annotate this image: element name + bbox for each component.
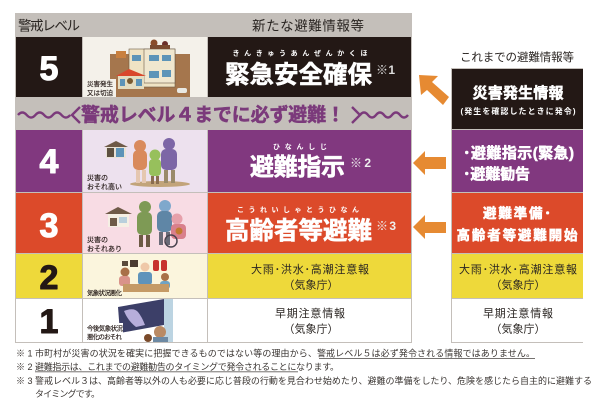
previous: early warning information bbox=[452, 299, 583, 342]
icon: family checking hazard map: 気象状況悪化 bbox=[87, 288, 122, 297]
previous: disaster occurrence information: (発生を確認したときに発令) bbox=[460, 106, 576, 116]
row: level 3: 3 bbox=[40, 207, 58, 245]
action label: heavy rain advisories: （気象庁） bbox=[284, 278, 338, 292]
previous: preparation and elderly evacuation: 高齢者等避難開始 bbox=[456, 227, 578, 243]
icon: elderly evacuating with wheelchair bbox=[83, 193, 207, 253]
action label: early warning information bbox=[208, 299, 411, 342]
heading: new evacuation information: 新たな避難情報等 bbox=[252, 18, 364, 34]
heading: warning level bbox=[16, 14, 81, 37]
icon: elderly evacuating with wheelchair: おそれあり bbox=[87, 245, 122, 253]
action label: evacuation of elderly: 高齢者等避難 bbox=[225, 217, 372, 245]
previous: disaster occurrence information bbox=[452, 69, 583, 129]
action label: early warning information: 早期注意情報 bbox=[275, 307, 345, 320]
previous: heavy rain advisories bbox=[452, 254, 583, 298]
row: level 4: 4 bbox=[40, 143, 59, 181]
row: level 1 bbox=[16, 299, 411, 342]
action label: heavy rain advisories bbox=[208, 254, 411, 298]
previous: heavy rain advisories: （気象庁） bbox=[490, 278, 546, 292]
previous: evacuation order and advisory bbox=[452, 130, 583, 192]
footnote 3: タイミングです。 bbox=[35, 388, 100, 399]
action label: evacuation order bbox=[208, 130, 411, 192]
footnote 1: 市町村が災害の状況を確実に把握できるものではない等の理由から、警戒レベル５は必ず発令される情報ではありません。 bbox=[35, 348, 535, 358]
footnote 1: ※ 1 bbox=[16, 348, 33, 358]
row: level 2 bbox=[16, 254, 411, 298]
footnote 3: 警戒レベル３は、高齢者等以外の人も必要に応じ普段の行動を見合わせ始めたり、避難の準備をしたり、危険を感じたら自主的に避難する bbox=[35, 375, 592, 386]
previous: heavy rain advisories: 大雨･洪水･高潮注意報 bbox=[459, 262, 577, 276]
icon: weather forecast on television: 悪化のおそれ bbox=[87, 332, 122, 341]
icon: family checking hazard map bbox=[83, 254, 207, 298]
row: level 2: 2 bbox=[40, 259, 58, 297]
icon: weather forecast on television: 今後気象状況 bbox=[87, 324, 124, 332]
action label: evacuation order: 避難指示 bbox=[250, 154, 345, 181]
row: level 4 bbox=[16, 130, 411, 192]
previous: evacuation order and advisory: ･避難指示(緊急) bbox=[463, 144, 574, 162]
footnote 3: ※ 3 bbox=[16, 376, 33, 386]
action label: secure immediate safety bbox=[208, 37, 411, 97]
previous: preparation and elderly evacuation bbox=[452, 193, 583, 253]
heading: previous information: これまでの避難情報等 bbox=[460, 50, 574, 64]
row: level 5 bbox=[16, 37, 411, 97]
row: level 5: 5 bbox=[40, 50, 58, 88]
icon: flooded building: 又は切迫 bbox=[87, 88, 114, 97]
icon: flooded building bbox=[83, 37, 207, 97]
action label: evacuation order: ひなんしじ bbox=[273, 142, 327, 151]
action label: heavy rain advisories: 大雨･洪水･高潮注意報 bbox=[251, 262, 369, 276]
banner: evacuate by level 4: 警戒レベル４までに必ず避難！ bbox=[81, 104, 345, 126]
previous: preparation and elderly evacuation: 避難準備･ bbox=[483, 205, 551, 221]
footnote 2: ※ 2 bbox=[16, 362, 33, 372]
arrow: to level 4 bbox=[413, 151, 446, 175]
action label: evacuation of elderly: こうれいしゃとうひなん bbox=[237, 205, 359, 214]
banner: evacuate by level 4 bbox=[16, 97, 411, 130]
footnote 2: 避難指示は、これまでの避難勧告のタイミングで発令されることになります。 bbox=[35, 361, 339, 372]
arrow: to level 3 bbox=[413, 215, 446, 239]
heading: warning level: 警戒レベル bbox=[18, 18, 80, 34]
action label: secure immediate safety: 緊急安全確保 bbox=[225, 61, 372, 89]
icon: evacuating family in rain bbox=[83, 130, 207, 192]
arrow: to level 5 bbox=[419, 75, 449, 105]
previous: evacuation order and advisory: ･避難勧告 bbox=[463, 165, 530, 183]
icon: flooded building: 災害発生 bbox=[87, 79, 114, 88]
footnote 3 bbox=[16, 375, 592, 399]
panel: previous evacuation information bbox=[451, 50, 583, 343]
previous: early warning information: 早期注意情報 bbox=[483, 307, 553, 320]
action label: evacuation of elderly bbox=[208, 193, 411, 253]
row: level 1: 1 bbox=[40, 303, 58, 341]
panel: new evacuation information table bbox=[15, 13, 412, 343]
icon: weather forecast on television bbox=[83, 299, 207, 342]
previous: disaster occurrence information: 災害発生情報 bbox=[472, 84, 564, 102]
heading: new evacuation information bbox=[83, 14, 411, 37]
previous: early warning information: （気象庁） bbox=[490, 322, 546, 336]
action label: early warning information: （気象庁） bbox=[284, 322, 338, 336]
icon: evacuating family in rain: 災害の bbox=[87, 173, 108, 182]
icon: evacuating family in rain: おそれ高い bbox=[87, 182, 122, 191]
action label: secure immediate safety: ※1 bbox=[376, 63, 395, 77]
action label: evacuation of elderly: ※3 bbox=[376, 219, 396, 233]
icon: elderly evacuating with wheelchair: 災害の bbox=[87, 235, 108, 244]
action label: evacuation order: ※2 bbox=[350, 156, 371, 170]
footnotes bbox=[16, 348, 592, 399]
row: level 3 bbox=[16, 193, 411, 253]
action label: secure immediate safety: きんきゅうあんぜんかくほ bbox=[232, 48, 368, 58]
